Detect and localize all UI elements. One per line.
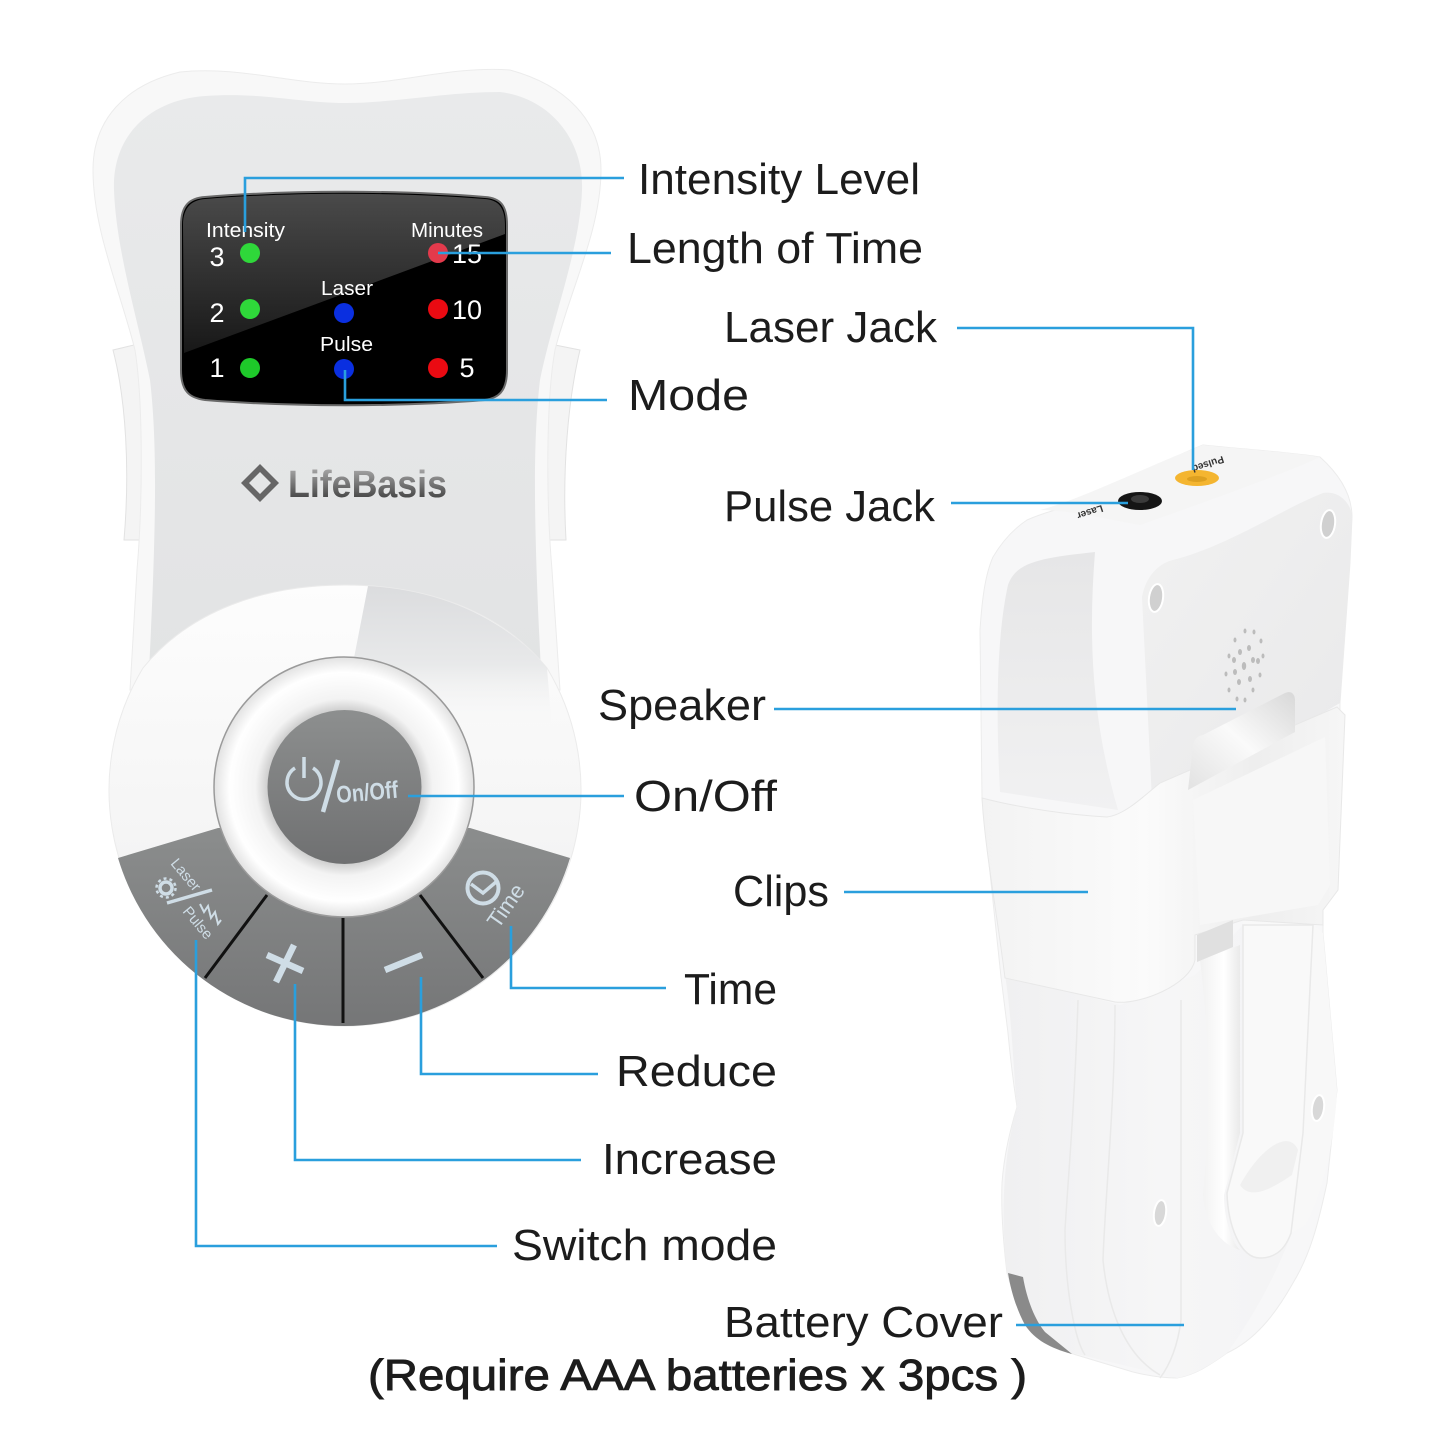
intensity column: Intensity [206,220,285,242]
center recess highlight [1200,945,1240,1250]
pulse jack: Laser [1075,502,1104,521]
clip slot [1188,692,1295,790]
display panel [181,192,507,405]
dome shaded right side [340,586,552,730]
top face [1040,445,1320,525]
label: Laser Jack: Laser Jack [724,303,938,352]
display background [181,192,507,405]
screw holes [1147,509,1337,613]
lower round housing with dome [109,585,581,1026]
minutes column: 5 [459,353,475,383]
label: Speaker: Speaker [598,681,766,730]
laser/pulse button icon: Laser [167,855,204,895]
lower screw holes [1152,1094,1326,1227]
leader lines [196,178,1236,1325]
lower gap under clip [1197,920,1233,962]
side view device [980,445,1352,1378]
laser/pulse button icon: Pulse [179,903,216,943]
plus button icon [267,945,303,982]
speaker holes [1224,628,1264,702]
handle strap [1243,917,1337,1233]
LifeBasis logo: LifeBasis [288,464,447,506]
handle loop shading [1240,1141,1298,1192]
label: Time: Time [684,965,777,1014]
button ring [214,657,474,917]
label: Mode: Mode [628,371,749,420]
on/off button [268,710,422,864]
power icon [287,757,338,812]
label: Pulse Jack: Pulse Jack [724,482,936,531]
label: Switch mode: Switch mode [512,1221,777,1270]
front view device [93,69,601,1026]
label: On/Off: On/Off [634,772,778,821]
side clips of front device [113,345,580,540]
label: Intensity Level: Intensity Level [638,155,920,204]
laser/pulse button icon [156,855,221,943]
gray button sector [118,828,570,1026]
label: Increase: Increase [602,1135,777,1184]
laser jack [1175,453,1225,486]
back plate [1142,493,1352,800]
device main silhouette [980,445,1352,1378]
panel seams [1065,1000,1181,1378]
minutes column: 15 [452,239,482,269]
mode column: Laser [321,278,373,300]
battery cover [1008,1273,1072,1354]
battery requirement note: (Require AAA batteries x 3pcs ) [368,1351,1027,1400]
label: Battery Cover: Battery Cover [724,1298,1003,1347]
device body outer shell [93,69,601,690]
label: Reduce: Reduce [616,1047,777,1096]
shell front highlight [998,552,1118,810]
label: Clips: Clips [733,867,829,916]
time button icon [468,872,530,933]
intensity column: 1 [209,353,225,383]
handle strap inner [1227,925,1313,1258]
intensity column: 3 [209,242,225,272]
label: Length of Time: Length of Time [627,224,923,273]
laser jack: Pulsed [1190,453,1225,474]
device front face [114,92,582,690]
minus button icon [385,955,422,970]
clip inner step [1193,737,1330,925]
clip band [982,707,1345,1002]
mode column [320,278,373,379]
mode column: Pulse [320,334,373,356]
time button icon: Time [482,879,530,933]
intensity column [206,220,285,383]
on/off button: On/Off [335,777,400,809]
pulse jack [1075,492,1162,521]
intensity column: 2 [209,298,225,328]
display gloss [183,194,505,353]
minutes column: 10 [452,295,482,325]
minutes column [411,220,483,383]
lower body panels [1004,917,1337,1378]
minutes column: Minutes [411,220,483,242]
button dividers [205,895,483,1023]
